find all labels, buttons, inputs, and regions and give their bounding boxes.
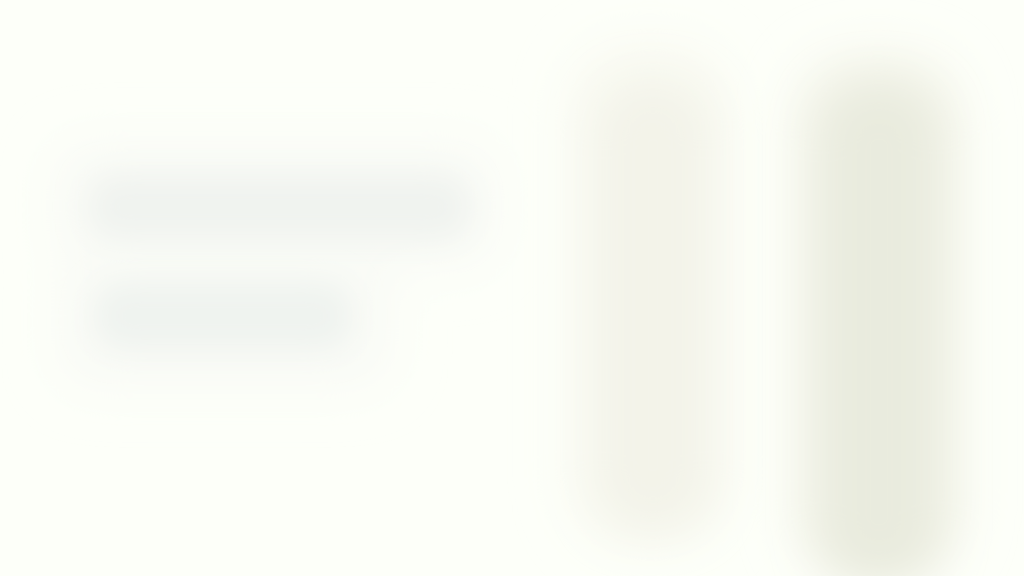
panel: lower left bar bbox=[94, 282, 352, 350]
panel: middle column bbox=[596, 80, 710, 530]
panel: right column halo bbox=[790, 50, 965, 576]
panel: right column bbox=[818, 82, 940, 576]
panel: soft halo behind left bars bbox=[50, 140, 500, 390]
panel: upper left bar bbox=[88, 174, 470, 240]
panel: middle column halo bbox=[565, 40, 735, 550]
